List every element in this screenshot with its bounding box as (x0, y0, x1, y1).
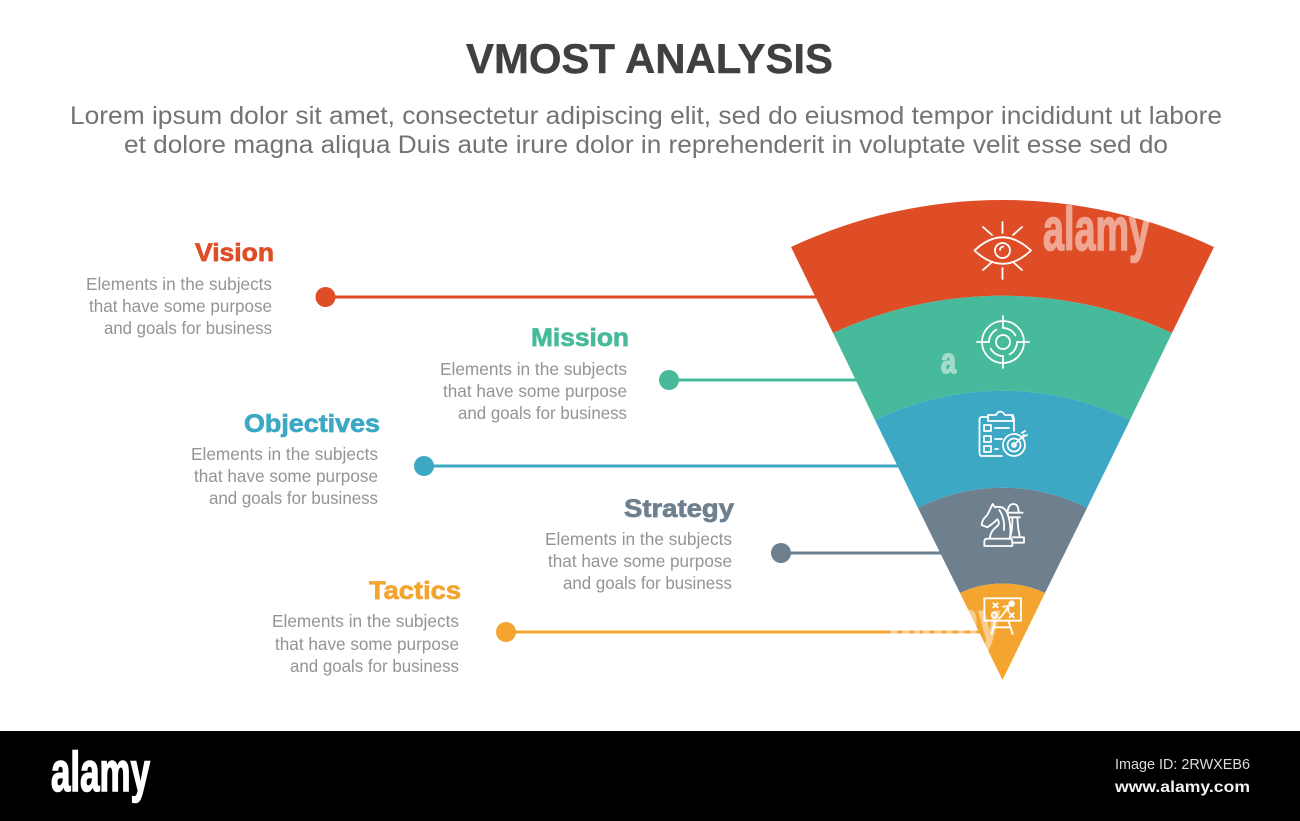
watermark: upper right: alamy (1043, 196, 1150, 263)
watermark: single letter: a (941, 340, 957, 381)
label: objectives: that have some purpose (194, 466, 378, 486)
icon: target (977, 316, 1029, 368)
footer band (0, 731, 1300, 821)
label: objectives: Elements in the subjects (191, 444, 378, 464)
label: vision: and goals for business (104, 318, 272, 338)
label: strategy: Strategy (624, 495, 734, 523)
intro text: Lorem ipsum dolor sit amet, consectetur adipiscing elit, sed do eiusmod tempor incididunt ut labore (70, 102, 1222, 130)
label: objectives (191, 410, 380, 508)
watermark: lower: alamy (890, 590, 1000, 652)
connector: vision (316, 287, 820, 307)
website: www.alamy.com (1114, 779, 1250, 796)
intro text (70, 102, 1222, 159)
icon: chess pieces (982, 504, 1024, 546)
label: strategy: that have some purpose (548, 551, 732, 571)
label: tactics: and goals for business (290, 656, 459, 676)
segment: objectives (875, 391, 1130, 508)
icon: clipboard with target (980, 412, 1027, 456)
label: mission: Mission (531, 324, 629, 352)
connector: tactics (496, 622, 985, 642)
title: VMOST ANALYSIS (466, 35, 833, 82)
funnel chart (791, 200, 1214, 680)
segment: tactics (960, 584, 1045, 680)
segment: strategy (918, 488, 1087, 593)
label: mission: and goals for business (458, 403, 627, 423)
label: strategy (545, 495, 734, 593)
label: objectives: and goals for business (209, 488, 378, 508)
label: tactics: that have some purpose (275, 634, 459, 654)
label: vision: Elements in the subjects (86, 274, 272, 294)
label: mission: that have some purpose (443, 381, 627, 401)
intro text: et dolore magna aliqua Duis aute irure dolor in reprehenderit in voluptate velit esse sed do (124, 131, 1168, 159)
icon: strategy board (984, 598, 1021, 634)
connector: objectives (414, 456, 902, 476)
label: vision (86, 239, 274, 338)
label: vision: that have some purpose (89, 296, 272, 316)
label: tactics: Tactics (369, 577, 461, 605)
connector: strategy (771, 543, 944, 563)
label: strategy: Elements in the subjects (545, 529, 732, 549)
label: strategy: and goals for business (563, 573, 732, 593)
icon: eye (974, 222, 1031, 279)
segment: mission (833, 296, 1172, 420)
footer logo: alamy (51, 740, 150, 803)
segment: vision (791, 200, 1214, 333)
image id: Image ID: 2RWXEB6 (1115, 757, 1250, 773)
label: tactics (272, 577, 461, 676)
connector: mission (659, 370, 860, 390)
label: tactics: Elements in the subjects (272, 611, 459, 631)
label: mission (440, 324, 629, 423)
label: mission: Elements in the subjects (440, 359, 627, 379)
label: objectives: Objectives (244, 410, 380, 438)
label: vision: Vision (195, 239, 274, 267)
